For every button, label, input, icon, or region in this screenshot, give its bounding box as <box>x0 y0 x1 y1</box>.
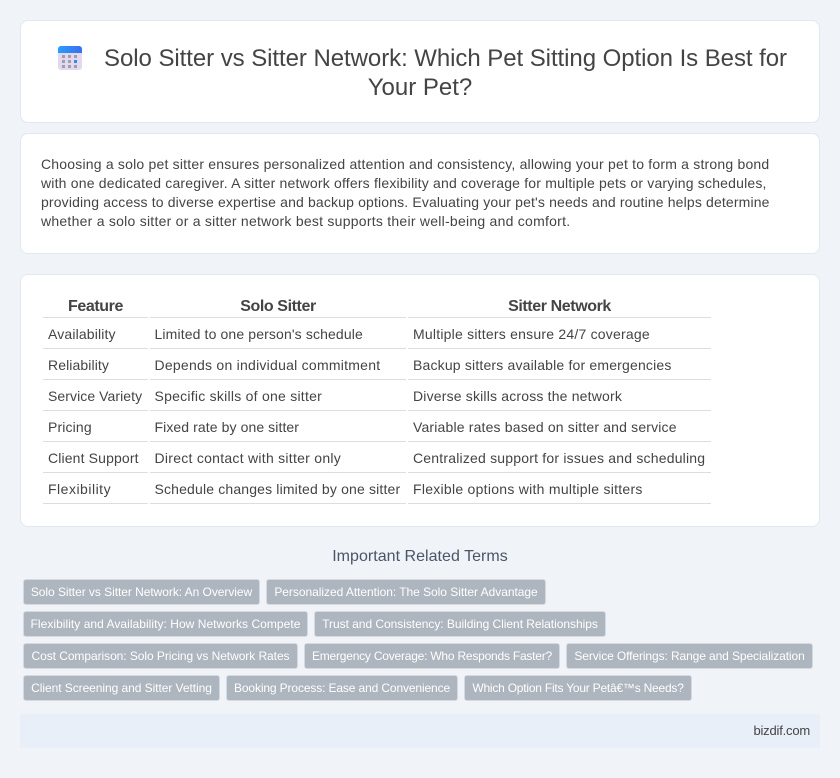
comparison table <box>43 298 711 504</box>
row: flexibility: Schedule changes limited by one sitter <box>154 481 400 497</box>
intro text: providing access to diverse expertise and backup options. Evaluating your pet's needs and routine helps determine <box>41 194 770 210</box>
intro text: with one dedicated caregiver. A sitter network offers flexibility and coverage for multiple pets or varying schedules, <box>41 175 767 191</box>
row: service variety: Specific skills of one sitter <box>154 388 322 404</box>
tag <box>23 675 220 701</box>
row: flexibility: Flexible options with multiple sitters <box>413 481 643 497</box>
row: reliability: Backup sitters available for emergencies <box>413 357 672 373</box>
tag <box>23 643 298 669</box>
table header: Feature <box>68 298 123 315</box>
row: availability: Multiple sitters ensure 24/7 coverage <box>413 326 650 342</box>
row: service variety: Diverse skills across the network <box>413 388 622 404</box>
tag <box>304 643 560 669</box>
icon: calendar <box>58 46 82 70</box>
tag <box>266 579 546 605</box>
tag: Flexibility and Availability: How Networks Compete <box>31 617 300 631</box>
tag: Solo Sitter vs Sitter Network: An Overview <box>31 585 252 599</box>
row: flexibility: Flexibility <box>48 481 111 497</box>
row: pricing: Pricing <box>48 419 92 435</box>
row: availability: Limited to one person's schedule <box>154 326 363 342</box>
tag: Service Offerings: Range and Specialization <box>574 649 805 663</box>
row: flexibility <box>48 481 643 497</box>
tag: Cost Comparison: Solo Pricing vs Network Rates <box>32 649 290 663</box>
tag <box>464 675 692 701</box>
row: service variety: Service Variety <box>48 388 142 404</box>
table header: Sitter Network <box>508 298 611 315</box>
table card <box>20 274 820 527</box>
title line 2: Your Pet? <box>368 74 472 101</box>
tag <box>23 611 308 637</box>
tag: Which Option Fits Your Petâ€™s Needs? <box>472 681 684 695</box>
row: pricing: Variable rates based on sitter and service <box>413 419 677 435</box>
row: reliability <box>48 357 672 373</box>
tag <box>23 579 260 605</box>
intro text: whether a solo sitter or a sitter network best supports their well-being and comfort. <box>41 213 570 229</box>
row: service variety <box>48 388 622 404</box>
row: reliability: Depends on individual commitment <box>154 357 380 373</box>
table header: Solo Sitter <box>240 298 316 315</box>
row: client support <box>48 450 705 466</box>
row: client support: Client Support <box>48 450 139 466</box>
intro text: Choosing a solo pet sitter ensures personalized attention and consistency, allowing your pet to form a strong bond <box>41 156 769 172</box>
tag: Emergency Coverage: Who Responds Faster? <box>312 649 552 663</box>
footer <box>20 714 820 748</box>
title card <box>20 20 820 123</box>
tag <box>566 643 813 669</box>
row: reliability: Reliability <box>48 357 109 373</box>
row: client support: Direct contact with sitter only <box>154 450 341 466</box>
title line 1: Solo Sitter vs Sitter Network: Which Pet Sitting Option Is Best for <box>104 45 787 72</box>
row: pricing <box>48 419 677 435</box>
intro text <box>41 156 770 229</box>
row: availability <box>48 326 650 342</box>
related terms heading: Important Related Terms <box>332 548 508 565</box>
tag: Booking Process: Ease and Convenience <box>234 681 450 695</box>
footer source: bizdif.com <box>753 723 810 738</box>
tag: Client Screening and Sitter Vetting <box>31 681 212 695</box>
row: client support: Centralized support for issues and scheduling <box>413 450 705 466</box>
tag <box>314 611 606 637</box>
tag <box>226 675 458 701</box>
related terms tags <box>23 579 813 701</box>
intro card <box>20 133 820 254</box>
table header <box>68 298 612 315</box>
row: pricing: Fixed rate by one sitter <box>154 419 299 435</box>
row: availability: Availability <box>48 326 116 342</box>
tag: Trust and Consistency: Building Client Relationships <box>322 617 598 631</box>
tag: Personalized Attention: The Solo Sitter Advantage <box>274 585 538 599</box>
